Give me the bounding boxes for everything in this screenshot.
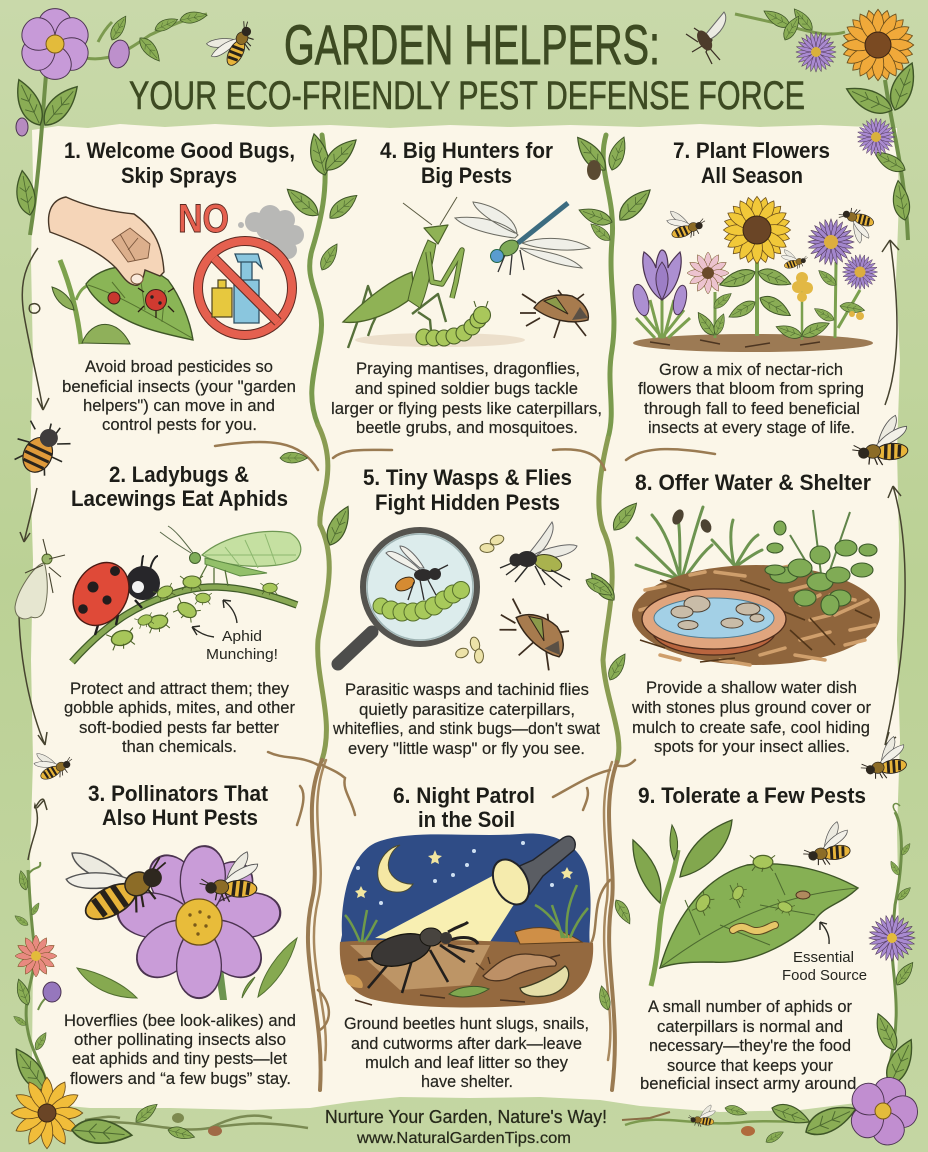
- icon: tachinid fly: [500, 522, 577, 587]
- heading 7: All Season: [701, 163, 803, 188]
- body text 3: [64, 1011, 296, 1088]
- body text 4: Praying mantises, dragonflies,: [356, 359, 580, 378]
- illustration: lacewing: [160, 526, 301, 586]
- illustration: stem: [72, 587, 297, 662]
- body text 4: [331, 359, 602, 437]
- title: [129, 13, 805, 118]
- heading 6: 6. Night Patrol: [393, 783, 535, 808]
- icon: no-spray sign: [198, 241, 292, 335]
- body text 5: every "little wasp" or fly you see.: [348, 739, 585, 758]
- body text 7: through fall to feed beneficial: [644, 399, 860, 418]
- body text 8: mulch to create safe, cool hiding: [632, 718, 870, 737]
- center vines: [215, 135, 715, 1090]
- panel 9: tolerate pests: [633, 783, 867, 1093]
- icon: left side lacewing: [15, 539, 65, 619]
- heading 3: [88, 781, 269, 830]
- border: bottom vines: [71, 1098, 860, 1146]
- icon: vine insect: [587, 160, 601, 180]
- title: GARDEN HELPERS:: [284, 13, 660, 76]
- body text 8: Provide a shallow water dish: [646, 678, 857, 697]
- body text 1: helpers") can move in and: [83, 396, 275, 415]
- illustration: magnifying glass: [338, 530, 477, 664]
- heading 2: [71, 462, 288, 511]
- right side arrows: [882, 240, 905, 745]
- panel 2: ladybugs and lacewings: [62, 462, 301, 756]
- heading 3: 3. Pollinators That: [88, 781, 269, 806]
- heading 1: 1. Welcome Good Bugs,: [64, 138, 295, 163]
- body text 5: quietly parasitize caterpillars,: [359, 700, 575, 719]
- body text 7: [638, 360, 864, 437]
- illustration: night sky: [340, 833, 591, 945]
- footer: www.NaturalGardenTips.com: [356, 1130, 571, 1147]
- body text 9: source that keeps your: [667, 1056, 833, 1075]
- body text 3: Hoverflies (bee look-alikes) and: [64, 1011, 296, 1030]
- body text 2: [64, 679, 295, 756]
- body text 2: than chemicals.: [122, 737, 237, 756]
- border: top-right sunflower and vine: [735, 1, 922, 240]
- icon: stink bug: [488, 594, 575, 673]
- illustration: plant stem and leaves: [633, 820, 732, 986]
- illustration: leaves: [77, 938, 297, 1000]
- illustration: crocus: [630, 250, 690, 338]
- illustration: hand: [49, 197, 164, 285]
- body text 3: flowers and “a few bugs” stay.: [70, 1069, 291, 1088]
- illustration: soil: [340, 928, 593, 1007]
- body text 1: Avoid broad pesticides so: [85, 357, 273, 376]
- callout: aphid munching: [192, 600, 278, 663]
- body text 9: caterpillars is normal and: [657, 1017, 843, 1036]
- body text 1: control pests for you.: [102, 415, 257, 434]
- body text 1: beneficial insects (your "garden: [62, 377, 296, 396]
- icon: small insects: [670, 508, 713, 534]
- footer: Nurture Your Garden, Nature's Way!: [325, 1107, 607, 1127]
- body text 4: and spined soldier bugs tackle: [355, 379, 578, 398]
- body text 3: other pollinating insects also: [74, 1030, 286, 1049]
- body text 6: and cutworms after dark—leave: [351, 1034, 582, 1053]
- heading 4: 4. Big Hunters for: [380, 138, 553, 163]
- icon: left side bee: [31, 741, 77, 785]
- body text 9: beneficial insect army around.: [640, 1074, 861, 1093]
- icon: eggs: [454, 533, 505, 663]
- illustration: flashlight beam: [375, 873, 518, 945]
- heading 4: Big Pests: [421, 163, 512, 188]
- panel 7: plant flowers: [630, 138, 882, 437]
- panel 6: night patrol: [340, 783, 593, 1091]
- illustration: purple flower: [115, 844, 283, 998]
- illustration: sunflower: [716, 189, 798, 336]
- body text 9: A small number of aphids or: [648, 997, 852, 1016]
- callout: essential food source: [782, 922, 867, 984]
- body text 7: insects at every stage of life.: [648, 418, 855, 437]
- body text 4: beetle grubs, and mosquitoes.: [356, 418, 578, 437]
- illustration: grasses: [636, 507, 762, 578]
- body text 5: [332, 680, 600, 758]
- illustration: asters: [803, 214, 882, 338]
- body text 9: [640, 997, 861, 1093]
- illustration: pink daisy: [687, 252, 734, 338]
- border: top-left flower and vine: [9, 9, 208, 235]
- heading 1: Skip Sprays: [121, 163, 237, 188]
- illustration: water dish and stones: [642, 589, 786, 655]
- icon: wasp: [799, 820, 853, 869]
- illustration: parasitic wasp: [386, 546, 448, 600]
- icon: large hoverfly: [57, 816, 180, 934]
- border: lower right vine and flowers: [835, 804, 928, 1152]
- illustration: leaf stem and ladybugs: [52, 260, 193, 344]
- body text 6: mulch and leaf litter so they: [365, 1053, 568, 1072]
- illustration: grass tufts: [345, 885, 588, 942]
- callout: aphid munching: Aphid: [222, 628, 262, 645]
- illustration: ladybug: [62, 552, 160, 636]
- heading 7: [673, 138, 830, 188]
- body text 8: with stones plus ground cover or: [631, 698, 871, 717]
- heading 6: in the Soil: [418, 807, 515, 832]
- illustration: mulch bed: [632, 565, 880, 665]
- illustration: caterpillar in lens: [373, 582, 470, 621]
- body text 6: have shelter.: [421, 1072, 513, 1091]
- label: NO: NO: [178, 197, 229, 241]
- body text 3: eat aphids and tiny pests—let: [72, 1049, 287, 1068]
- icon: right side wasp top: [850, 414, 910, 468]
- icon: title bee: [202, 9, 261, 71]
- callout: essential food source: Food Source: [782, 967, 867, 984]
- heading 5: 5. Tiny Wasps & Flies: [363, 465, 572, 490]
- border: lower left vine and flowers: [8, 862, 83, 1149]
- icon: right side wasp bottom: [856, 735, 909, 782]
- body text 5: whiteflies, and stink bugs—don't swat: [332, 719, 600, 738]
- heading 9: 9. Tolerate a Few Pests: [638, 783, 866, 808]
- heading 4: [380, 138, 553, 188]
- body text 7: Grow a mix of nectar-rich: [659, 360, 843, 379]
- heading 5: [363, 465, 572, 515]
- panel 3: pollinators: [57, 781, 297, 1088]
- body text 6: [344, 1014, 589, 1091]
- body text 9: necessary—they're the food: [649, 1036, 851, 1055]
- body text 6: Ground beetles hunt slugs, snails,: [344, 1014, 589, 1033]
- body text 1: [62, 357, 296, 434]
- icon: title fly: [686, 12, 726, 64]
- icon: small hoverfly: [200, 852, 258, 902]
- illustration: caterpillar: [416, 301, 490, 346]
- heading 3: Also Hunt Pests: [102, 805, 258, 830]
- body text 2: Protect and attract them; they: [70, 679, 289, 698]
- body text 2: gobble aphids, mites, and other: [64, 698, 295, 717]
- stem inner colour: [72, 587, 297, 662]
- illustration: slug and grub: [449, 954, 569, 997]
- illustration: aphids: [106, 576, 279, 652]
- panel 4: big hunters: [331, 138, 602, 437]
- callout: aphid munching: Munching!: [206, 646, 278, 663]
- icon: three bees: [664, 202, 877, 272]
- vine leaves: [280, 132, 655, 1011]
- panel 1: welcome good bugs: [49, 138, 304, 434]
- illustration: soldier bug: [520, 290, 588, 338]
- ground shadow: [355, 333, 525, 347]
- illustration: flashlight: [486, 836, 575, 911]
- heading 2: 2. Ladybugs &: [109, 462, 249, 487]
- body text 5: Parasitic wasps and tachinid flies: [345, 680, 589, 699]
- panel 8: water and shelter: [631, 470, 880, 756]
- illustration: dragonfly: [455, 202, 590, 275]
- icon: smoke: [238, 205, 304, 266]
- body text 7: flowers that bloom from spring: [638, 379, 864, 398]
- footer: [325, 1107, 607, 1147]
- body text 2: soft-bodied pests far better: [79, 718, 279, 737]
- body text 8: spots for your insect allies.: [654, 737, 850, 756]
- heading 6: [393, 783, 535, 832]
- icon: left side beetle: [7, 413, 75, 482]
- illustration: ground beetle: [358, 922, 478, 993]
- heading 1: [64, 138, 295, 188]
- panel 5: tiny wasps and flies: [332, 465, 600, 758]
- illustration: praying mantis: [343, 197, 462, 348]
- callout: essential food source: Essential: [793, 949, 854, 966]
- illustration: herb plant: [765, 510, 877, 615]
- heading 7: 7. Plant Flowers: [673, 138, 830, 163]
- illustration: big leaf with pests: [660, 855, 858, 968]
- illustration: goldenrod: [774, 272, 831, 341]
- heading 2: Lacewings Eat Aphids: [71, 486, 288, 511]
- body text 4: larger or flying pests like caterpillars,: [331, 399, 602, 418]
- heading 8: 8. Offer Water & Shelter: [635, 470, 871, 495]
- illustration: moon and stars: [355, 841, 573, 905]
- body text 8: [631, 678, 871, 756]
- heading 5: Fight Hidden Pests: [375, 490, 560, 515]
- left side arrows: [19, 248, 49, 860]
- illustration: soil: [633, 334, 873, 352]
